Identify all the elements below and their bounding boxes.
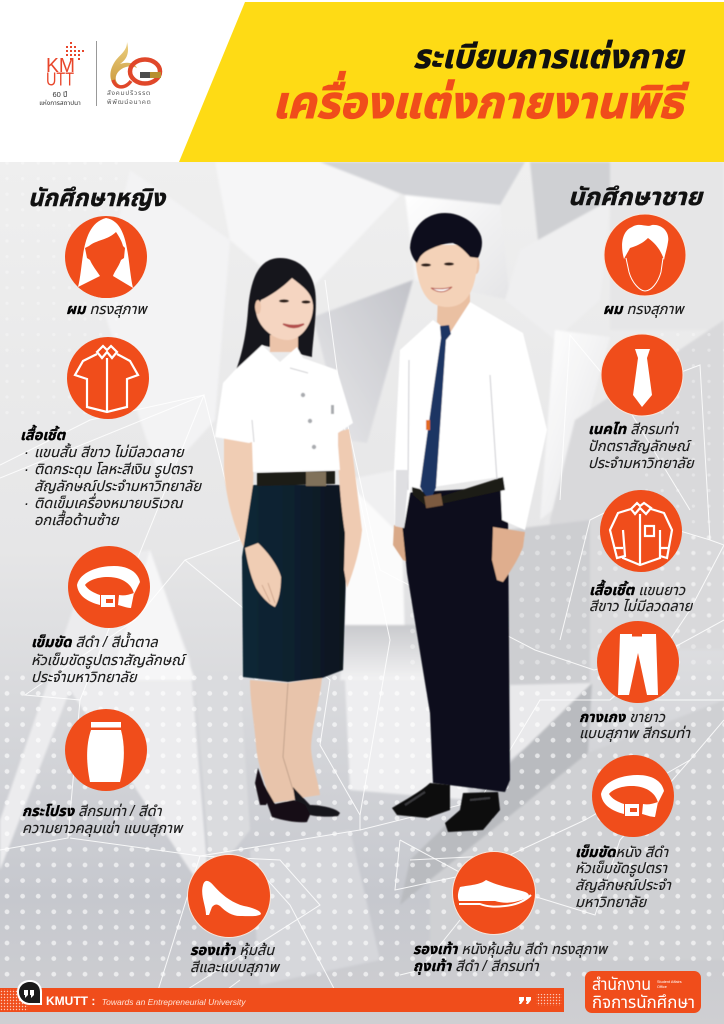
text: male shoe: รองเท้า หนังหุ้มส้น สีดำ ทรงสุภาพ [413,941,609,958]
text: female shirt: · [24,462,29,478]
text: male belt: เข็มขัดหนัง สีดำ [575,844,669,861]
item: male belt [575,755,674,911]
right arm [337,429,362,588]
text: female shirt [20,424,202,529]
icon: short-sleeve shirt [67,337,149,419]
text: trousers [579,710,691,742]
left hand [245,543,281,607]
text: male shoe [413,941,609,975]
text: necktie [588,421,695,472]
text: female shirt: สัญลักษณ์ประจำมหาวิทยาลัย [34,479,202,495]
text: female shoe: สีและแบบสุภาพ [190,960,281,976]
badge: Student Affairs Office: สำนักงาน [592,976,651,994]
heading: male students: นักศึกษาชาย [568,184,704,211]
title line 2: เครื่องแต่งกายงานพิธี [272,71,690,128]
title line 1: ระเบียบการแต่งกาย [413,38,685,75]
header band [0,0,724,162]
text: female shirt: อกเสื้อด้านซ้าย [34,510,120,529]
face [256,278,313,340]
text: skirt: กระโปรง สีกรมท่า / สีดำ [22,803,163,820]
icon: trousers [597,621,679,703]
neck and face [437,290,470,335]
photo: female student [215,258,362,822]
item: male shirt [589,490,694,615]
item: female hair [65,216,148,318]
yellow title panel [179,2,724,162]
text: female shoe [190,942,281,976]
long-sleeve shirt [394,302,547,530]
hair [235,258,316,373]
footer bar [0,980,564,1012]
logo: KMUTT 60 years: สังคมปริวรรต [107,89,151,97]
text: male belt [575,844,672,911]
item: female shirt [20,337,202,529]
item: skirt [22,709,184,837]
icon: quote bubble [17,980,42,1005]
item: trousers [579,621,691,742]
icon: belt [68,546,150,628]
text: male belt: สัญลักษณ์ประจำ [575,878,672,894]
text: trousers: กางเกง ขายาว [579,710,666,726]
text: female shirt: ติดกระดุม โลหะสีเงิน รูปตรา [34,461,194,478]
label: male hair: ผม ทรงสุภาพ [603,302,685,318]
item: necktie [588,334,695,472]
icon: leather shoe [452,852,536,934]
text: necktie: ประจำมหาวิทยาลัย [588,456,695,472]
text: male shirt [589,579,694,615]
icon: high heel [188,854,270,938]
logo: KMUTT 60 years: แห่งการสถาปนา [39,98,81,107]
short-sleeve shirt [215,345,353,472]
label: female hair: ผม ทรงสุภาพ [66,302,148,318]
icon: necktie [601,334,683,416]
photo: male student [392,213,547,832]
text: male belt: หัวเข็มขัดรูปตรา [575,860,668,877]
skirt [242,485,347,682]
title [272,38,690,128]
icon: long-sleeve shirt [600,490,682,572]
text: necktie: เนคไท สีกรมท่า [588,421,679,438]
logo wordmark: KM [46,55,75,77]
text: female shoe: รองเท้า หุ้มส้น [190,942,275,959]
60 emblem [110,42,161,88]
hair [410,213,482,263]
badge: Student Affairs Office: Office [657,985,667,989]
text: male shoe: ถุงเท้า สีดำ / สีกรมท่า [413,958,540,975]
icon: belt [592,755,674,837]
logo: KMUTT 60 years: UTT [46,70,74,90]
text: female belt: เข็มขัด สีดำ / สีน้ำตาล [31,632,158,651]
logo: KMUTT 60 years [39,41,161,107]
text: female shirt: เสื้อเชิ้ต [20,424,67,444]
text: female belt [31,632,187,686]
shoes [392,783,450,818]
logo: KMUTT 60 years: พิพัฒน์อนาคต [107,98,152,106]
item: female belt [31,546,187,686]
text: male belt: มหาวิทยาลัย [575,895,647,911]
left hand [393,525,410,563]
left arm [224,436,258,550]
icon: female hair [65,216,147,298]
closing quote mark [519,997,531,1004]
logo cross of dots [66,42,84,60]
badge: Student Affairs Office: Student Affairs [657,980,682,984]
text: female shirt: · [24,496,29,512]
badge: Student Affairs Office: กิจการนักศึกษา [592,993,695,1012]
text: necktie: ปักตราสัญลักษณ์ [588,439,692,455]
heading: female students: นักศึกษาหญิง [28,185,166,212]
belt [257,471,335,486]
text: female belt: ประจำมหาวิทยาลัย [31,670,138,686]
text: female belt: หัวเข็มขัดรูปตราสัญลักษณ์ [31,652,187,669]
tie [420,325,451,502]
text: male shirt: เสื้อเชิ้ต แขนยาว [589,579,686,599]
icon: male hair [604,214,686,296]
text: female shirt: แขนสั้น สีขาว ไม่มีลวดลาย [34,443,185,461]
text: trousers: แบบสุภาพ สีกรมท่า [579,725,691,742]
logo: KMUTT 60 years: 60 ปี [53,90,67,99]
right hand [492,527,525,582]
belt [412,477,505,507]
icon: skirt [65,709,147,791]
trousers [402,487,510,792]
badge: Student Affairs Office [585,971,701,1013]
text: skirt: ความยาวคลุมเข่า แบบสุภาพ [22,820,184,837]
footer slogan: KMUTT : Towards an Entrepreneurial University [46,994,246,1008]
shoes [293,787,340,817]
text: skirt [22,803,184,837]
item: male hair [603,214,686,318]
text: male shirt: สีขาว ไม่มีลวดลาย [589,598,694,615]
item: female shoe [188,854,281,976]
text: female shirt: · [24,445,29,461]
text: female shirt: ติดเข็มเครื่องหมายบริเวณ [34,493,183,512]
item: male shoe [413,852,609,975]
